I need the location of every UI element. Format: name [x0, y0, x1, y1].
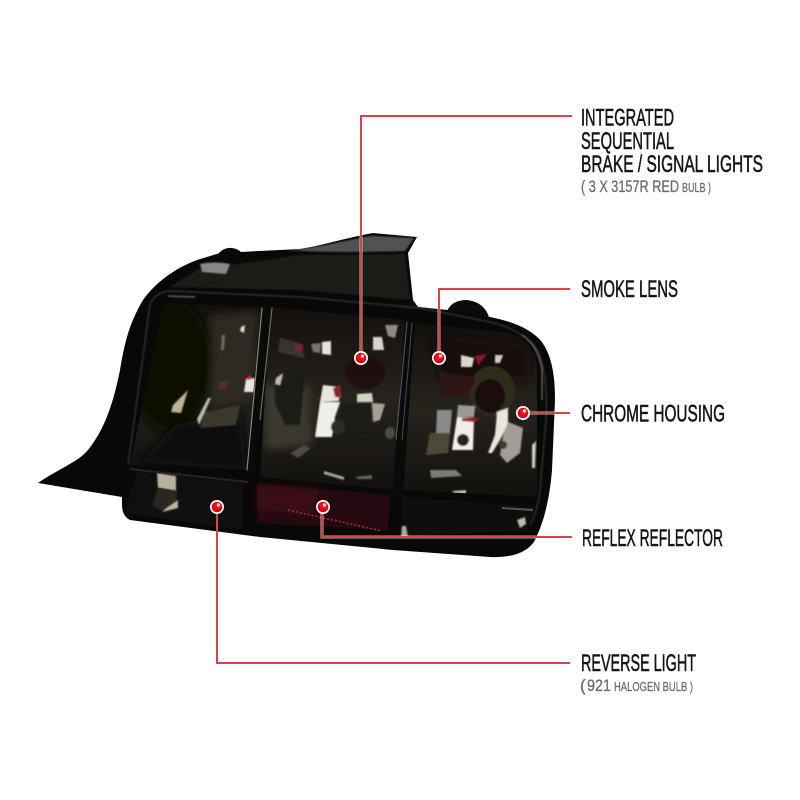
- callout: reverse light: [210, 500, 696, 695]
- label: SEQUENTIAL: [581, 128, 674, 155]
- leader line: [361, 116, 572, 358]
- tail light assembly: [38, 233, 555, 557]
- lower right lens: [400, 497, 535, 537]
- callout: reflex reflector: [316, 500, 723, 552]
- callout: smoke lens: SMOKE LENS: [581, 276, 678, 303]
- callout: chrome housing: CHROME HOUSING: [581, 400, 725, 428]
- callout: chrome housing: [516, 400, 725, 428]
- callout: reverse light: HALOGEN BULB ): [614, 679, 693, 694]
- frame edge lines: [128, 291, 546, 525]
- mounting tabs: [218, 248, 489, 317]
- vertical lens dividers: [247, 308, 412, 492]
- callout: reverse light: (: [580, 676, 586, 695]
- reflex reflector: [257, 483, 390, 531]
- marker: [354, 351, 368, 365]
- right lens: [403, 323, 537, 497]
- center lens: [260, 307, 405, 490]
- callout: integrated sequential brake / signal lights: [354, 104, 763, 365]
- callout: smoke lens: [432, 276, 678, 365]
- label: [581, 104, 763, 196]
- label: INTEGRATED: [581, 104, 674, 132]
- top flange highlight: [288, 236, 414, 252]
- housing body: [38, 233, 555, 557]
- label: BULB ): [682, 180, 711, 195]
- left lens: [128, 299, 262, 470]
- lower left reverse lens: [125, 468, 248, 530]
- label: ( 3 X 3157R RED: [581, 177, 679, 196]
- callout: reverse light: REVERSE LIGHT: [581, 650, 696, 677]
- callout: reverse light: 921: [587, 676, 611, 695]
